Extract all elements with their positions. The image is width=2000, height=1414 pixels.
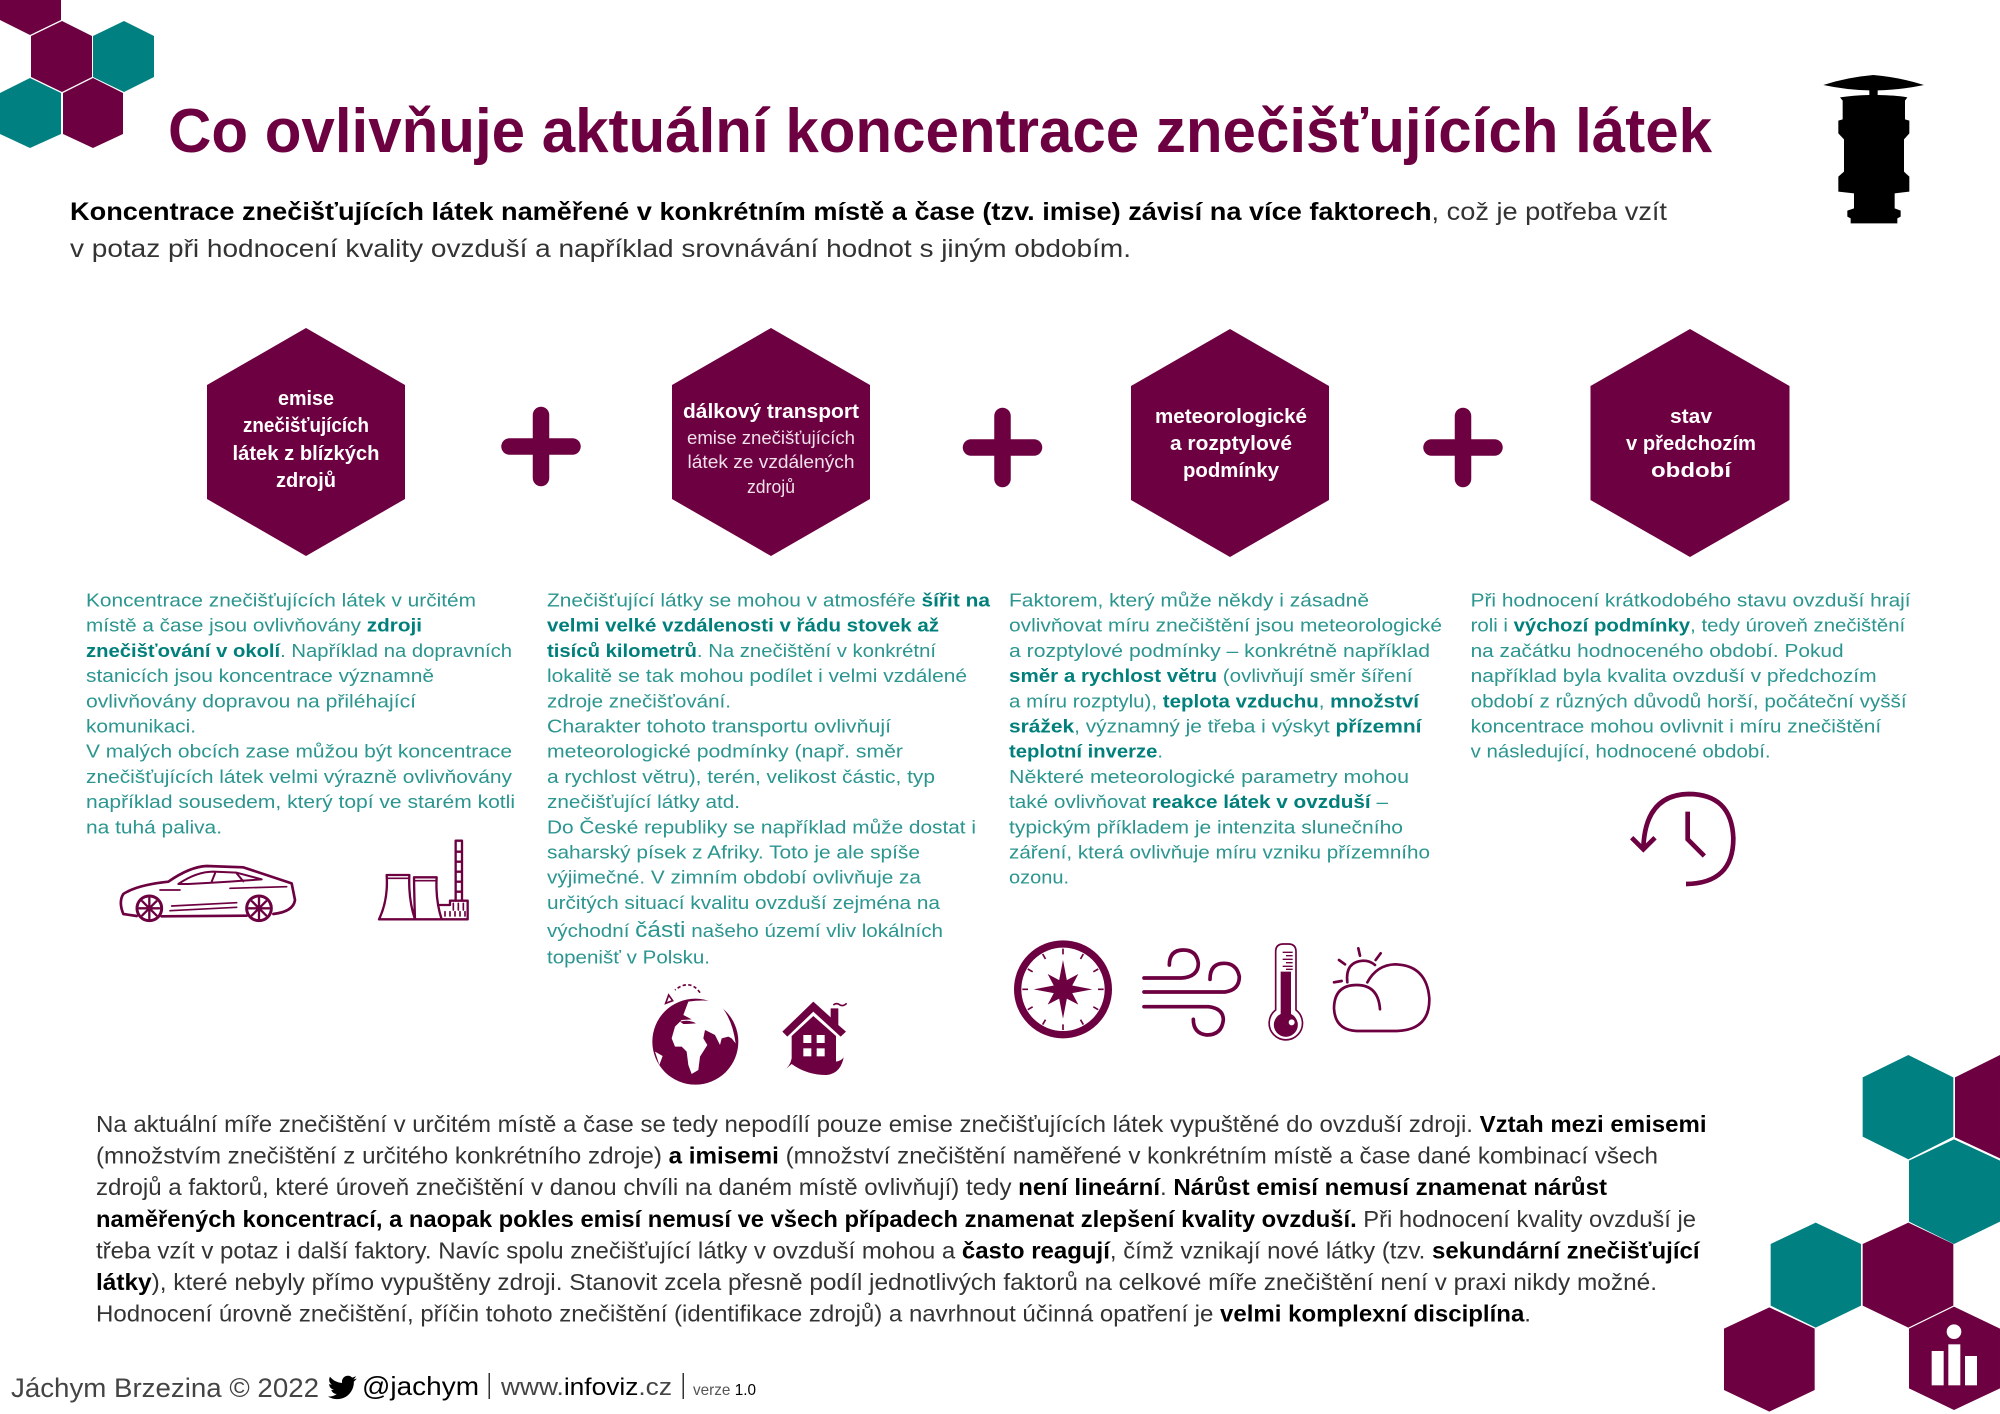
plus sign 3 (1432, 416, 1494, 479)
text: dálkový transport: topenišť v Polsku. (547, 946, 710, 968)
icon: chimney (1823, 75, 1924, 223)
panel: dálkový transport (547, 328, 991, 1085)
text: meteorologické podmínky: a míru rozptylu), teplota vzduchu , množství (1009, 690, 1420, 711)
icon: globe (652, 985, 738, 1085)
text: meteorologické podmínky: teplotní inverze . (1009, 741, 1163, 762)
footer credits (11, 1371, 756, 1403)
text: meteorologické podmínky: směr a rychlost větru (ovlivňují směr šíření (1009, 665, 1413, 686)
text: stav v předchozím období: období z různých důvodů horší, počáteční vyšší (1471, 690, 1908, 711)
hexagon: meteorologické podmínky: a rozptylové (1170, 433, 1292, 455)
text: stav v předchozím období: roli i výchozí podmínky , tedy úroveň znečištění (1471, 615, 1906, 636)
text: meteorologické podmínky: také ovlivňovat reakce látek v ovzduší – (1009, 791, 1389, 812)
hexagon: meteorologické podmínky: meteorologické (1155, 406, 1307, 428)
text: stav v předchozím období: například byla kvalita ovzduší v předchozím (1471, 665, 1877, 686)
text: dálkový transport: meteorologické podmínky (např. směr (547, 741, 903, 762)
text: dálkový transport: Znečišťující látky se mohou v atmosféře šířit na (547, 590, 991, 610)
text: dálkový transport: saharský písek z Afriky. Toto je ale spíše (547, 842, 920, 862)
hexagon: dálkový transport: dálkový transport (683, 401, 859, 423)
hexagon: meteorologické podmínky (1131, 329, 1329, 557)
footer credits: Jáchym Brzezina © 2022 (11, 1373, 319, 1403)
panel: meteorologické podmínky (1009, 329, 1442, 1040)
intro text: v potaz při hodnocení kvality ovzduší a například srovnávání hodnot s jiným obdobím. (70, 235, 1131, 263)
bottom paragraph: (množstvím znečištění z určitého konkrétního zdroje) a imisemi (množství znečištění naměřené v konkrétním místě a čase dané kombinací všech (96, 1143, 1658, 1169)
hexagon: meteorologické podmínky: podmínky (1183, 460, 1280, 482)
hexagon: stav v předchozím období (1590, 329, 1790, 557)
text: emise: ovlivňovány dopravou na přiléhající (86, 690, 417, 711)
text: meteorologické podmínky: Některé meteorologické parametry mohou (1009, 766, 1409, 787)
text: stav v předchozím období (1471, 590, 1912, 762)
text: emise: místě a čase jsou ovlivňovány zdroji (86, 615, 422, 636)
text: dálkový transport: a rychlost větru), terén, velikost částic, typ (547, 766, 935, 787)
text: dálkový transport: znečišťující látky atd. (547, 791, 740, 812)
text: dálkový transport (547, 590, 991, 968)
text: meteorologické podmínky: typickým příkladem je intenzita slunečního (1009, 816, 1403, 837)
text: stav v předchozím období: na začátku hodnoceného období. Pokud (1471, 640, 1844, 661)
text: stav v předchozím období: koncentrace mohou ovlivnit i míru znečištění (1471, 716, 1882, 736)
text: meteorologické podmínky: ovlivňovat míru znečištění jsou meteorologické (1009, 615, 1442, 636)
hexagon: emise (207, 328, 405, 556)
hexagon: dálkový transport: zdrojů (747, 476, 795, 497)
hexagon: dálkový transport: látek ze vzdálených (688, 451, 854, 472)
bottom paragraph: naměřených koncentrací, a naopak pokles emisí nemusí ve všech případech znamenat zlepšení kvality ovzduší. Při hodnocení kvality ovzduší je (96, 1206, 1696, 1232)
text: dálkový transport: výjimečné. V zimním období ovlivňuje za (547, 867, 922, 888)
icon: car (121, 866, 295, 921)
text: dálkový transport: Charakter tohoto transportu ovlivňují (547, 716, 892, 736)
text: meteorologické podmínky: ozonu. (1009, 867, 1069, 888)
intro text (70, 198, 1667, 263)
text: emise: stanicích jsou koncentrace významně (86, 665, 434, 686)
footer credits: @jachym (362, 1371, 479, 1401)
icon: house with smoke (782, 1002, 847, 1075)
intro text: Koncentrace znečišťujících látek naměřené v konkrétním místě a čase (tzv. imise) závisí na více faktorech , což je potřeba vzít (70, 198, 1667, 226)
text: emise (86, 590, 515, 837)
bottom paragraph: Na aktuální míře znečištění v určitém místě a čase se tedy nepodílí pouze emise znečišťujících látek vypuštěné do ovzduší zdroji. Vztah mezi emisemi (96, 1111, 1706, 1137)
icon: clock with back arrow (1632, 794, 1733, 884)
hexagon: emise: znečišťujících (243, 415, 369, 437)
hexagon: stav v předchozím období: stav (1670, 406, 1713, 428)
text: emise: znečišťujících látek velmi výrazně ovlivňovány (86, 766, 513, 787)
icon: power plant (379, 841, 468, 919)
text: emise: komunikaci. (86, 716, 196, 736)
hexagon: stav v předchozím období: období (1651, 460, 1733, 482)
text: stav v předchozím období: v následující, hodnocené období. (1471, 741, 1771, 762)
text: meteorologické podmínky: srážek , významný je třeba i výskyt přízemní (1009, 716, 1422, 736)
text: meteorologické podmínky: Faktorem, který může někdy i zásadně (1009, 590, 1369, 610)
hexagon: emise: látek z blízkých (232, 443, 380, 465)
footer credits: verze 1.0 (693, 1382, 756, 1399)
text: emise: například sousedem, který topí ve starém kotli (86, 791, 515, 812)
bottom paragraph: zdrojů a faktorů, které úroveň znečištění v danou chvíli na daném místě ovlivňují) tedy není lineární . Nárůst emisí nemusí znamenat nárůst (96, 1174, 1607, 1200)
text: dálkový transport: východní části našeho území vliv lokálních (547, 917, 943, 942)
plus sign 2 (971, 416, 1034, 479)
text: emise: na tuhá paliva. (86, 816, 222, 837)
bottom paragraph (96, 1111, 1706, 1327)
hexagon: stav v předchozím období: v předchozím (1626, 433, 1756, 455)
bottom paragraph: Hodnocení úrovně znečištění, příčin tohoto znečištění (identifikace zdrojů) a navrhnout účinná opatření je velmi komplexní disciplína . (96, 1301, 1531, 1327)
text: dálkový transport: lokalitě se tak mohou podílet i velmi vzdálené (547, 665, 967, 686)
hexagon: emise: emise (278, 388, 334, 410)
title: Co ovlivňuje aktuální koncentrace znečišťujících látek (168, 97, 1712, 166)
text: emise: znečišťování v okolí . Například na dopravních (86, 640, 512, 661)
bottom paragraph: třeba vzít v potaz i další faktory. Navíc spolu znečišťující látky v ovzduší mohou a často reagují , čímž vznikají nové látky (tzv. sekundární znečišťující (96, 1237, 1701, 1263)
icon: thermometer (1269, 944, 1302, 1040)
hexagon: dálkový transport: emise znečišťujících (687, 427, 855, 448)
panel: emise z blízkých zdrojů (86, 328, 515, 921)
text: stav v předchozím období: Při hodnocení krátkodobého stavu ovzduší hrají (1471, 590, 1912, 610)
text: meteorologické podmínky: a rozptylové podmínky – konkrétně například (1009, 640, 1430, 661)
footer credits: www.infoviz .cz (500, 1374, 672, 1401)
text: meteorologické podmínky: záření, která ovlivňuje míru vzniku přízemního (1009, 842, 1430, 862)
text: dálkový transport: Do České republiky se například může dostat i (547, 816, 976, 837)
icon: compass (1018, 944, 1108, 1035)
text: dálkový transport: velmi velké vzdálenosti v řádu stovek až (547, 615, 939, 636)
icon: wind (1144, 950, 1239, 1035)
bottom paragraph: látky), které nebyly přímo vypuštěny zdroji. Stanovit zcela přesně podíl jednotlivých faktorů na celkové míře znečištění není v praxi nikdy možné. (96, 1269, 1657, 1295)
text: meteorologické podmínky (1009, 590, 1442, 888)
decoration: top-left hexagons (0, 0, 154, 148)
plus sign 1 (510, 415, 572, 478)
text: dálkový transport: tisíců kilometrů . Na znečištění v konkrétní (547, 640, 937, 661)
icon: sun and cloud (1334, 948, 1429, 1031)
text: emise: Koncentrace znečišťujících látek v určitém (86, 590, 476, 610)
panel: stav v předchozím období (1471, 329, 1912, 884)
decoration: bottom-right hexagons with logo (1724, 1055, 2000, 1412)
text: dálkový transport: určitých situací kvalitu ovzduší zejména na (547, 892, 941, 913)
text: emise: V malých obcích zase můžou být koncentrace (86, 741, 512, 762)
text: dálkový transport: zdroje znečišťování. (547, 690, 731, 711)
hexagon: dálkový transport (672, 328, 870, 556)
hexagon: emise: zdrojů (276, 470, 336, 492)
